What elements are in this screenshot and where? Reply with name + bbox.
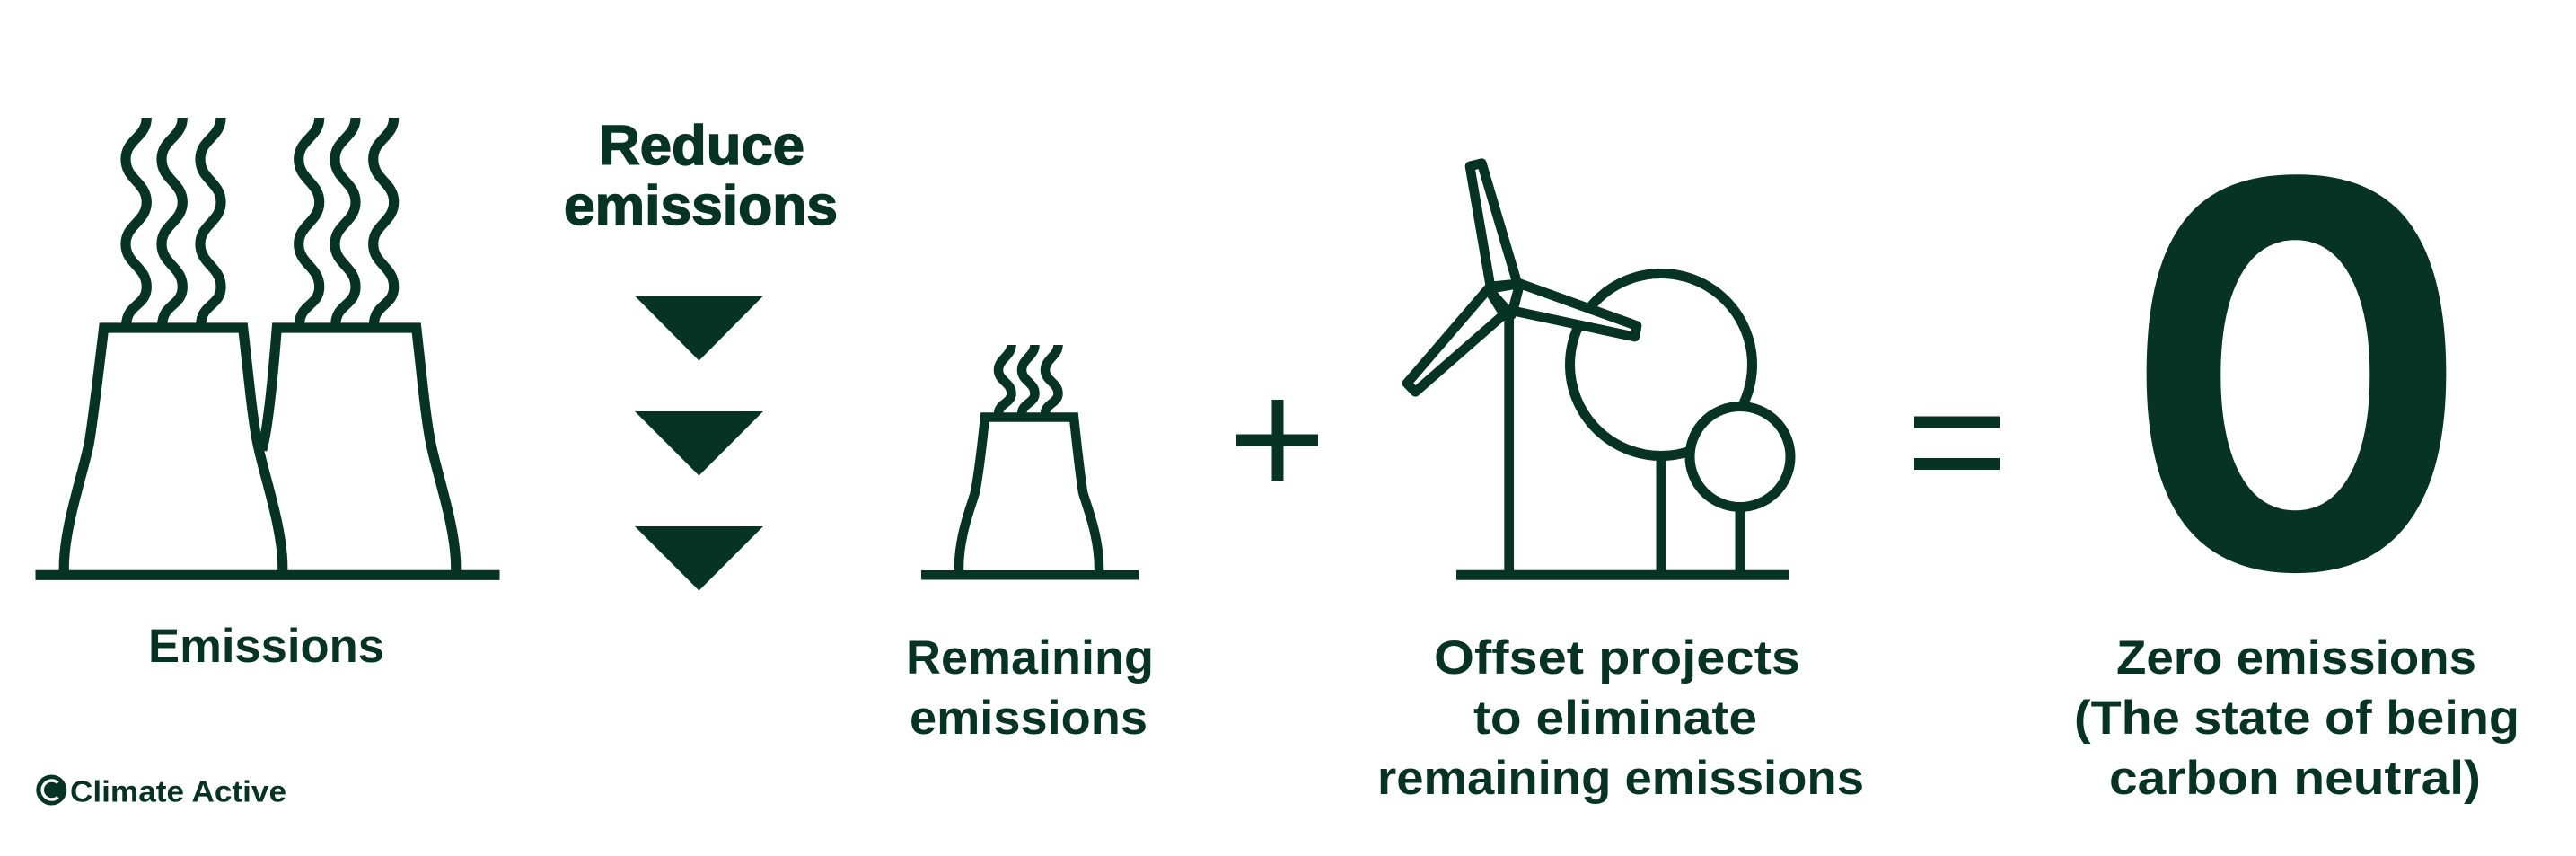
large zero: 0 (2122, 58, 2472, 687)
smoke: first tower (126, 118, 221, 325)
turbine tower (1504, 312, 1514, 575)
icon: three downward triangles (635, 296, 763, 591)
heading: reduce emissions: Reduce (599, 115, 804, 177)
tree: large (1569, 273, 1753, 575)
tower: left (64, 328, 283, 571)
heading: reduce emissions (564, 115, 838, 237)
label: offset projects (1377, 631, 1864, 805)
smoke: small tower (998, 345, 1058, 414)
icon: small cooling tower with smoke (921, 345, 1139, 575)
smoke: second tower (299, 118, 394, 325)
ground line (921, 570, 1139, 580)
label: emissions: Emissions (148, 620, 384, 673)
ground line (36, 570, 499, 580)
turbine blades (1407, 163, 1637, 392)
label: offset projects: remaining emissions (1377, 752, 1864, 805)
heading: reduce emissions: emissions (564, 175, 838, 237)
icon: logo roundel (36, 774, 66, 805)
label: zero emissions: carbon neutral) (2109, 752, 2481, 805)
tower: right (262, 328, 456, 571)
tree: small (1690, 406, 1790, 575)
label: zero emissions: Zero emissions (2116, 631, 2476, 684)
icon: two cooling towers with smoke (36, 118, 499, 575)
panel: emissions (36, 118, 499, 673)
label: remaining emissions: Remaining (906, 631, 1154, 684)
logo: Climate Active (36, 774, 286, 808)
panel: zero emissions (2074, 58, 2519, 805)
panel: reduce emissions (564, 115, 838, 591)
panel: remaining emissions (906, 345, 1154, 745)
label: zero emissions: (The state of being (2074, 692, 2519, 745)
label: zero emissions (2074, 631, 2519, 805)
ground line (1456, 570, 1789, 580)
label: remaining emissions: emissions (910, 692, 1147, 745)
wordmark: Climate Active (70, 774, 286, 808)
tower: small (959, 417, 1099, 571)
label: offset projects: to eliminate (1473, 692, 1757, 745)
label: remaining emissions (906, 631, 1154, 745)
panel: offset projects (1377, 163, 1864, 805)
icon: equals sign (1914, 417, 2000, 470)
icon: wind turbine and trees (1407, 163, 1790, 575)
icon: plus sign (1236, 400, 1318, 481)
label: offset projects: Offset projects (1434, 631, 1800, 684)
